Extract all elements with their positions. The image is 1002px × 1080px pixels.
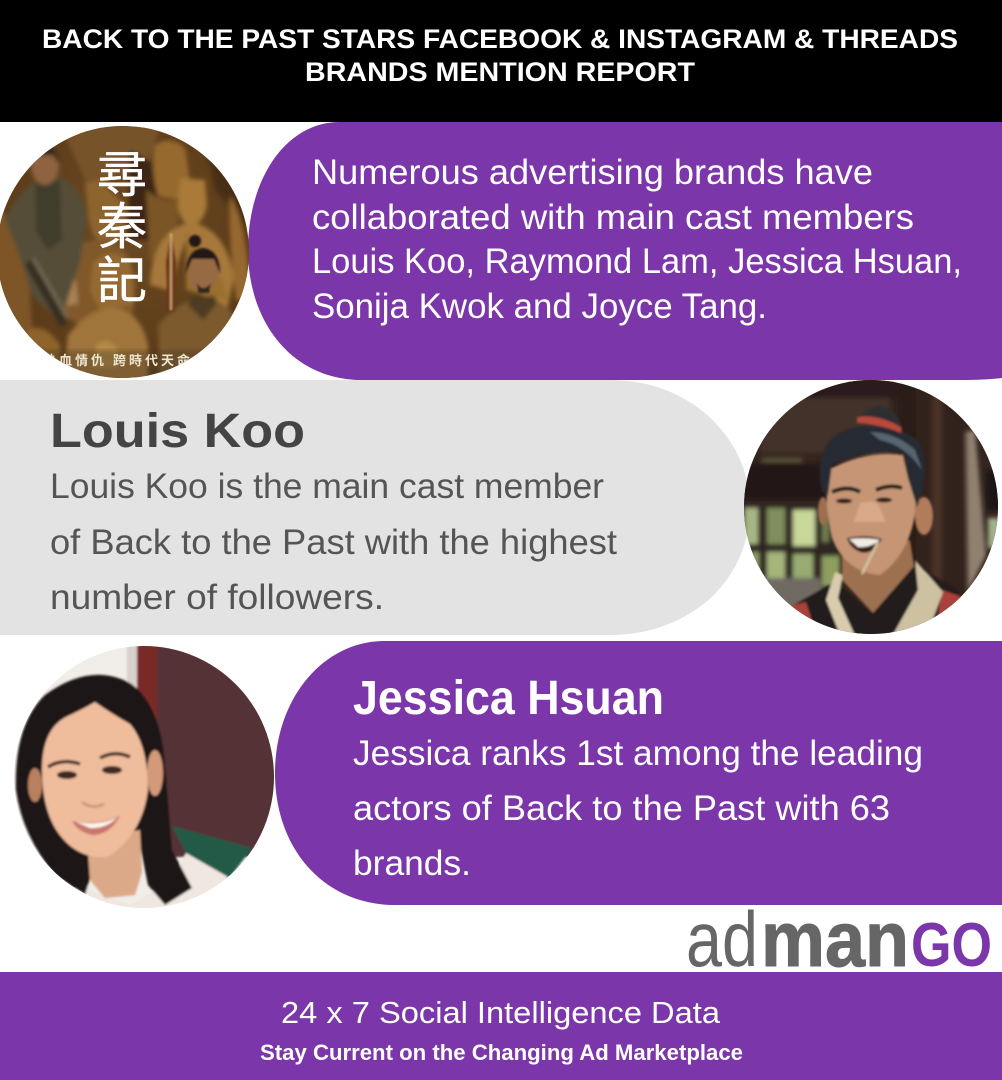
icon: drama poster circle: [0, 120, 255, 390]
dark recesses: [126, 150, 158, 242]
top-right statue: [153, 141, 190, 200]
man in armour, top-left: [5, 175, 87, 322]
intro text: Louis Koo, Raymond Lam, Jessica Hsuan,: [312, 242, 962, 281]
intro text: Numerous advertising brands have: [312, 153, 873, 192]
hair: [16, 675, 192, 905]
heading: Jessica Hsuan: Jessica Hsuan: [353, 672, 664, 725]
poster tagline: 熱血情仇 跨時代天命: [43, 350, 193, 369]
pillar: [919, 397, 966, 608]
white shirt: [74, 852, 230, 908]
topknot: [862, 406, 902, 428]
bottom haze: [43, 348, 202, 378]
panel: Jessica Hsuan: [275, 641, 1002, 905]
mouth: [847, 536, 882, 553]
brows and eyes: [48, 762, 80, 767]
Louis Koo text: of Back to the Past with the highest: [50, 523, 617, 562]
ears: [147, 750, 163, 796]
poster title characters: [98, 152, 146, 302]
foreground statue: [90, 254, 134, 310]
sword and rifle: [28, 262, 64, 325]
neck: [842, 540, 914, 613]
centre statue: [85, 180, 125, 246]
footer banner: [0, 972, 1002, 1080]
panel: intro: [248, 122, 1002, 380]
poster title characters: 記: [97, 253, 147, 309]
title: BACK TO THE PAST STARS FACEBOOK & INSTAGRAM & THREADS: [42, 24, 958, 54]
face: [827, 454, 916, 575]
footer subline: Stay Current on the Changing Ad Marketplace: [260, 1040, 743, 1065]
logo: admango: [686, 895, 992, 983]
title: [42, 24, 958, 87]
man, lower right: [157, 300, 234, 373]
window lattice: [740, 503, 840, 593]
robe: [794, 564, 959, 634]
Louis Koo text: [50, 467, 617, 617]
intro text: Sonija Kwok and Joyce Tang.: [312, 287, 767, 326]
intro text: [312, 153, 962, 326]
Jessica Hsuan text: [353, 734, 923, 883]
logo: admango: ad: [686, 895, 758, 983]
logo: admango: man: [761, 895, 909, 983]
header banner: [0, 0, 1002, 122]
Louis Koo text: number of followers.: [50, 578, 384, 617]
heading: Louis Koo: Louis Koo: [50, 405, 305, 458]
footer tagline: 24 x 7 Social Intelligence Data: [281, 995, 721, 1030]
Jessica Hsuan text: actors of Back to the Past with 63: [353, 789, 890, 828]
intro text: collaborated with main cast members: [312, 198, 914, 237]
hair: [820, 426, 925, 507]
green jacket: [172, 826, 252, 880]
face: [42, 702, 148, 857]
Jessica Hsuan text: brands.: [353, 844, 471, 883]
nose: [82, 802, 104, 807]
hanging cloth: [966, 430, 986, 592]
neck: [87, 830, 142, 898]
brows and eyes: [832, 488, 860, 492]
icon: Jessica Hsuan portrait: [10, 642, 280, 915]
collar: [826, 572, 857, 640]
right statue: [178, 178, 207, 226]
icon: Louis Koo portrait: [740, 376, 1002, 640]
Louis Koo text: Louis Koo is the main cast member: [50, 467, 604, 506]
left statue: [0, 211, 34, 334]
title: BRANDS MENTION REPORT: [305, 57, 696, 87]
mouth: [72, 816, 120, 835]
Jessica Hsuan text: Jessica ranks 1st among the leading: [353, 734, 923, 773]
ears: [915, 497, 933, 535]
poster title characters: 尋: [97, 147, 147, 203]
poster title characters: 秦: [97, 199, 147, 255]
upper glow: [66, 126, 160, 182]
panel: Louis Koo: [0, 380, 750, 635]
